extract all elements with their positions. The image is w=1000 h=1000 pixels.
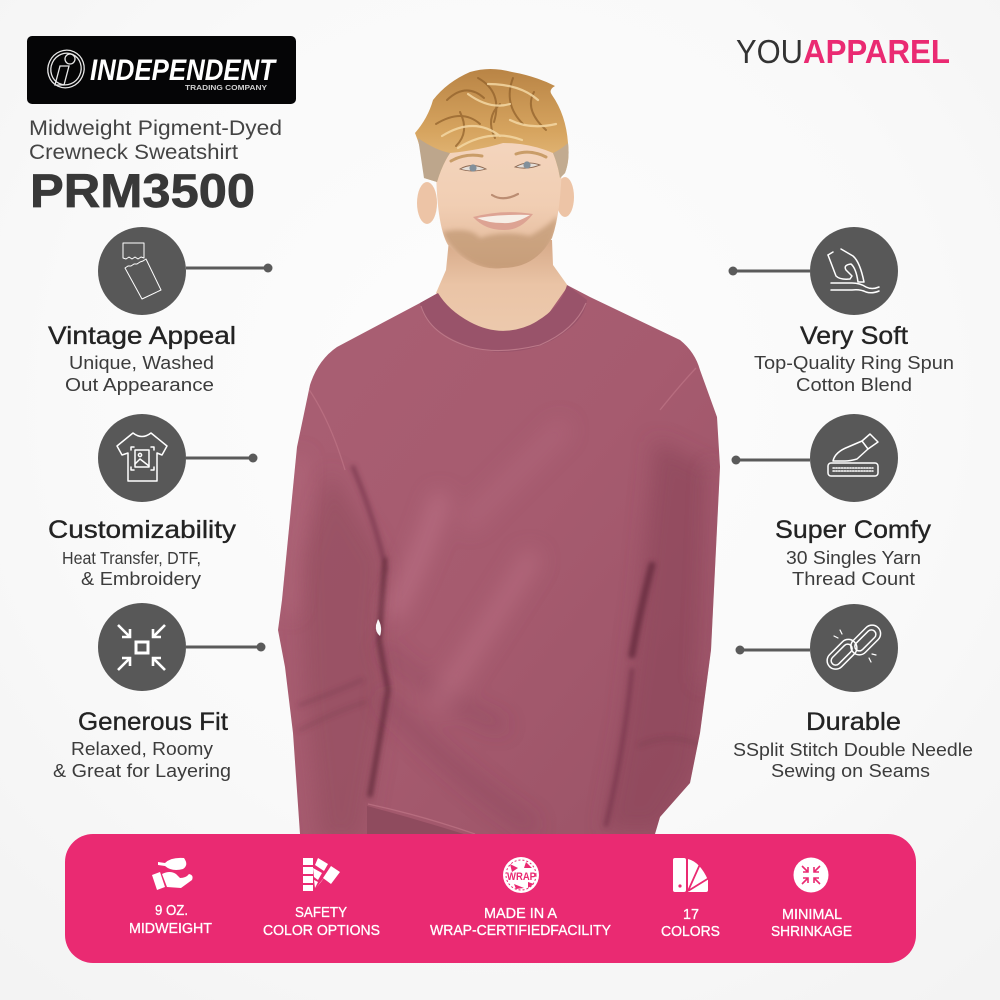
icon: arrows pointing inward <box>118 625 165 670</box>
nose <box>492 194 518 198</box>
icon: WRAP globe seal <box>503 857 539 893</box>
feature: Generous Fit: & Great for Layering <box>53 760 231 781</box>
feature: Super Comfy: 30 Singles Yarn <box>786 547 921 568</box>
armpit gap <box>376 619 381 636</box>
brand: YouApparel: YOU <box>736 33 803 70</box>
feature: Very Soft: Cotton Blend <box>796 374 912 395</box>
feature: Durable <box>733 604 973 781</box>
bottom specs panel <box>65 834 916 963</box>
person wearing sweatshirt <box>278 69 720 840</box>
brand: YouApparel <box>736 33 950 70</box>
icon: hand on soft fabric <box>828 249 879 293</box>
feature: Generous Fit: Relaxed, Roomy <box>71 738 214 759</box>
sweatshirt <box>278 285 720 840</box>
feature: Customizability: & Embroidery <box>81 568 202 589</box>
soft sleeve shading <box>300 440 715 840</box>
feature: Durable: Durable <box>806 708 901 736</box>
feature: Generous Fit: Generous Fit <box>78 708 228 736</box>
spec: safety color options: SAFETY <box>295 905 347 921</box>
stubble <box>442 216 558 271</box>
neck <box>436 240 568 340</box>
feature: Vintage Appeal: Out Appearance <box>65 374 214 395</box>
icon: WRAP globe seal: WRAP <box>507 871 536 883</box>
icon: colour swatch fan <box>303 858 340 891</box>
icon: chain links <box>824 622 884 673</box>
icon: torn tag <box>123 243 161 299</box>
product title: PRM3500 <box>30 164 255 217</box>
brows and eyes <box>451 152 546 172</box>
logo: Independent Trading Company <box>27 36 296 104</box>
feature: Durable: SSplit Stitch Double Needle <box>733 739 973 760</box>
logo: Independent Trading Company: INDEPENDENT <box>90 54 277 87</box>
spec: 17 colors <box>661 858 720 940</box>
feature: Very Soft: Very Soft <box>800 322 908 350</box>
icon: colour fan deck <box>673 858 709 892</box>
spec: 17 colors: 17 <box>683 907 699 923</box>
spec: WRAP-certified <box>430 857 611 939</box>
face <box>436 110 562 269</box>
spec: 9 oz midweight: MIDWEIGHT <box>129 921 212 937</box>
feature: Customizability: Customizability <box>48 516 237 544</box>
spec: minimal shrinkage: MINIMAL <box>782 907 842 923</box>
feature: Customizability <box>48 414 258 589</box>
feature: Durable: Sewing on Seams <box>771 760 930 781</box>
spec: WRAP-certified: WRAP-CERTIFIEDFACILITY <box>430 923 611 939</box>
ears <box>417 177 574 224</box>
feature: Very Soft: Top-Quality Ring Spun <box>754 352 954 373</box>
mouth <box>473 212 533 230</box>
emblem <box>42 44 90 94</box>
spec: 9 oz midweight: 9 OZ. <box>155 903 188 919</box>
feature: Generous Fit <box>53 603 266 781</box>
feature: Super Comfy: Super Comfy <box>775 516 932 544</box>
icon: hand holding leaf <box>152 858 193 890</box>
spec: WRAP-certified: MADE IN A <box>484 906 557 922</box>
feature: Vintage Appeal <box>48 227 272 395</box>
spec: safety color options <box>263 858 380 939</box>
soft body folds <box>382 504 526 684</box>
shoulder seams and hem <box>308 368 696 834</box>
feature: Vintage Appeal: Unique, Washed <box>69 352 214 373</box>
feature: Customizability: Heat Transfer, DTF, <box>62 548 201 568</box>
brand: YouApparel: APPAREL <box>803 33 950 70</box>
product title <box>29 117 282 217</box>
spec: safety color options: COLOR OPTIONS <box>263 923 380 939</box>
feature: Very Soft <box>728 227 954 395</box>
spec: 9 oz midweight <box>129 858 212 937</box>
hair <box>415 69 569 182</box>
product title: Midweight Pigment-Dyed <box>29 117 282 140</box>
spec: minimal shrinkage <box>771 858 852 940</box>
feature: Super Comfy: Thread Count <box>792 568 915 589</box>
fold shadows <box>300 467 700 825</box>
icon: hand pressing mattress <box>828 434 878 476</box>
product title: Crewneck Sweatshirt <box>29 141 238 164</box>
collar <box>420 285 587 352</box>
spec: 17 colors: COLORS <box>661 924 720 940</box>
logo: Independent Trading Company: TRADING COMPANY <box>185 83 267 92</box>
feature: Super Comfy <box>732 414 932 589</box>
icon: printed t-shirt <box>117 433 167 481</box>
feature: Vintage Appeal: Vintage Appeal <box>48 322 236 350</box>
icon: shrink circle <box>794 858 828 892</box>
spec: minimal shrinkage: SHRINKAGE <box>771 924 852 940</box>
